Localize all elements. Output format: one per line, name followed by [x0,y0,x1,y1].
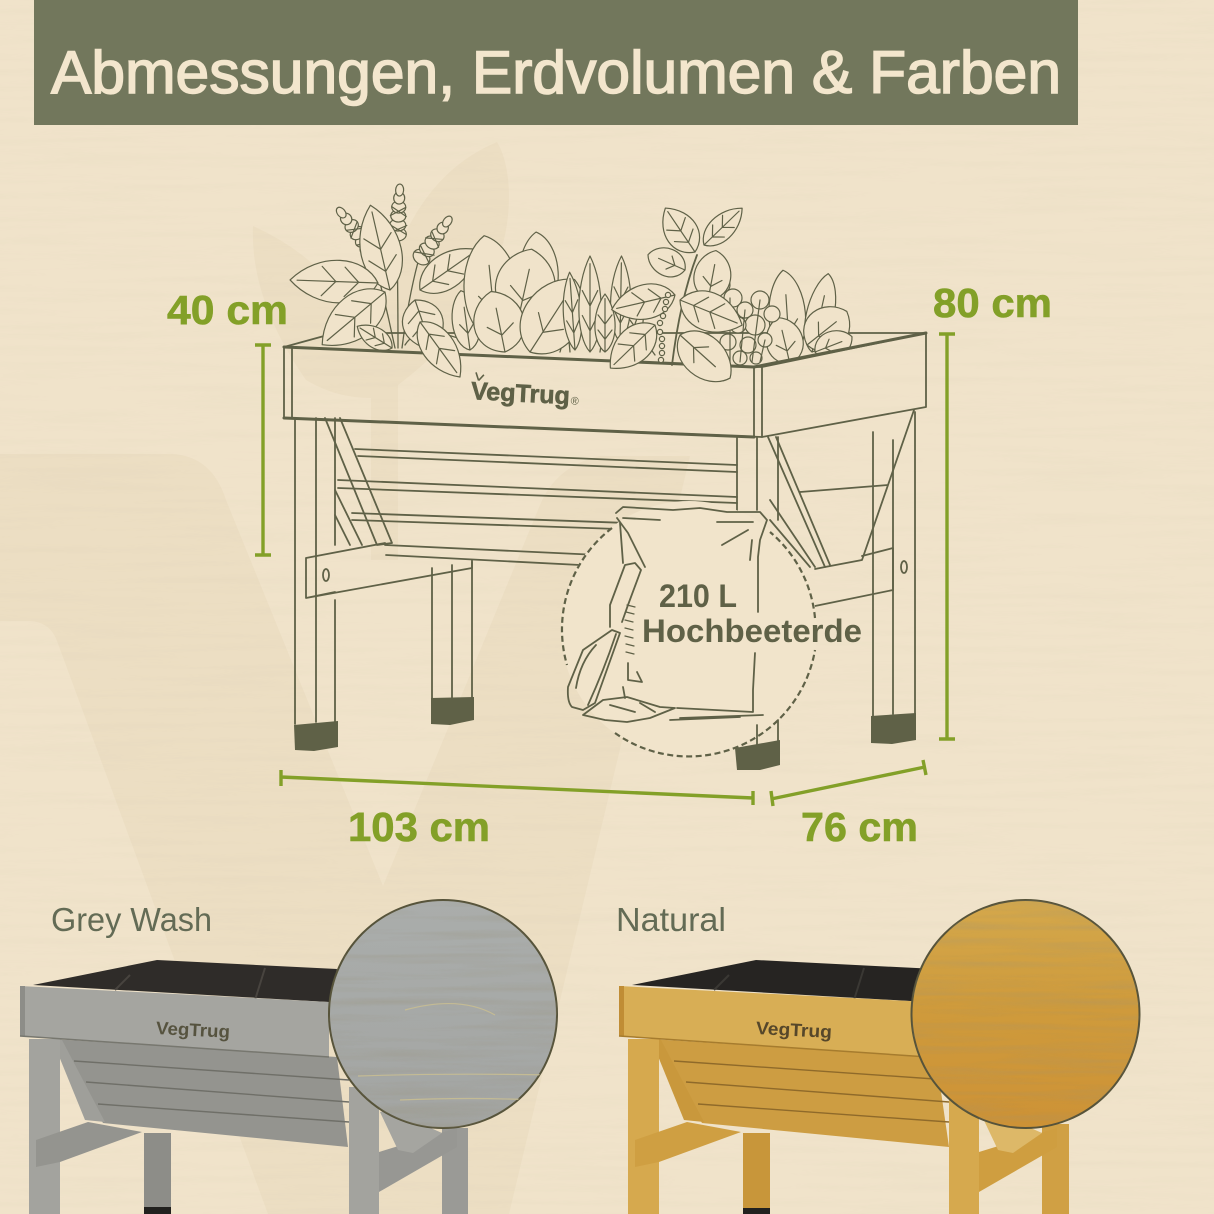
left leg [29,1039,60,1214]
far leg [442,1128,468,1214]
dimension: 76 cm: 76 cm [801,804,918,850]
trowel [568,563,641,710]
slats [52,1039,348,1147]
berries [657,292,671,363]
grey wash swatch [329,900,557,1128]
callout backdrop [561,501,817,757]
dimension: 76 cm [771,760,926,850]
cross bars [979,1128,1057,1192]
watermark: large V logo [0,142,690,1214]
dashed circle [562,528,815,756]
dimension: 40 cm [167,287,288,555]
logo: VegTrug [156,1018,230,1042]
natural swatch [911,900,1140,1128]
far leg [1042,1124,1069,1214]
back leg [743,1133,770,1214]
liner [632,960,936,1002]
soil type label: Hochbeeterde [642,613,862,649]
dimension: 103 cm [281,770,753,850]
natural planter [619,960,1069,1214]
feet [294,697,916,751]
slats [651,1039,949,1147]
soil bag callout [561,501,862,770]
bolt holes [323,561,907,581]
back leg [144,1133,171,1214]
back legs and structure [284,333,926,724]
right leg [349,1087,379,1214]
dimension: 80 cm [933,280,1052,739]
bag outline [616,507,767,712]
logo: VegTrug [756,1018,832,1042]
plant foliage [289,184,861,368]
rim [20,986,329,1057]
dimension: 103 cm: 103 cm [348,804,490,850]
VegTrug logo: ® [570,395,579,408]
cross bars [379,1128,457,1192]
front right foot [735,720,780,770]
Natural label: Natural [616,901,726,938]
left leg [628,1039,659,1214]
title banner: Abmessungen, Erdvolumen & Farben [51,39,1061,106]
dimension: 40 cm: 40 cm [167,287,288,333]
right leg [949,1087,979,1214]
overhanging herb plant [407,199,751,395]
liner [33,960,337,1002]
VegTrug logo: VegTrug [470,377,571,410]
soil pile [583,697,763,722]
curly lettuce [719,282,781,365]
dimension: 80 cm: 80 cm [933,280,1052,326]
bed rim [284,333,926,437]
grey wash planter [20,960,468,1214]
soil volume label: 210 L [659,578,737,614]
rim [619,986,928,1057]
raised bed line drawing [284,184,926,751]
title banner [34,0,1078,125]
Grey Wash label: Grey Wash [51,901,212,938]
